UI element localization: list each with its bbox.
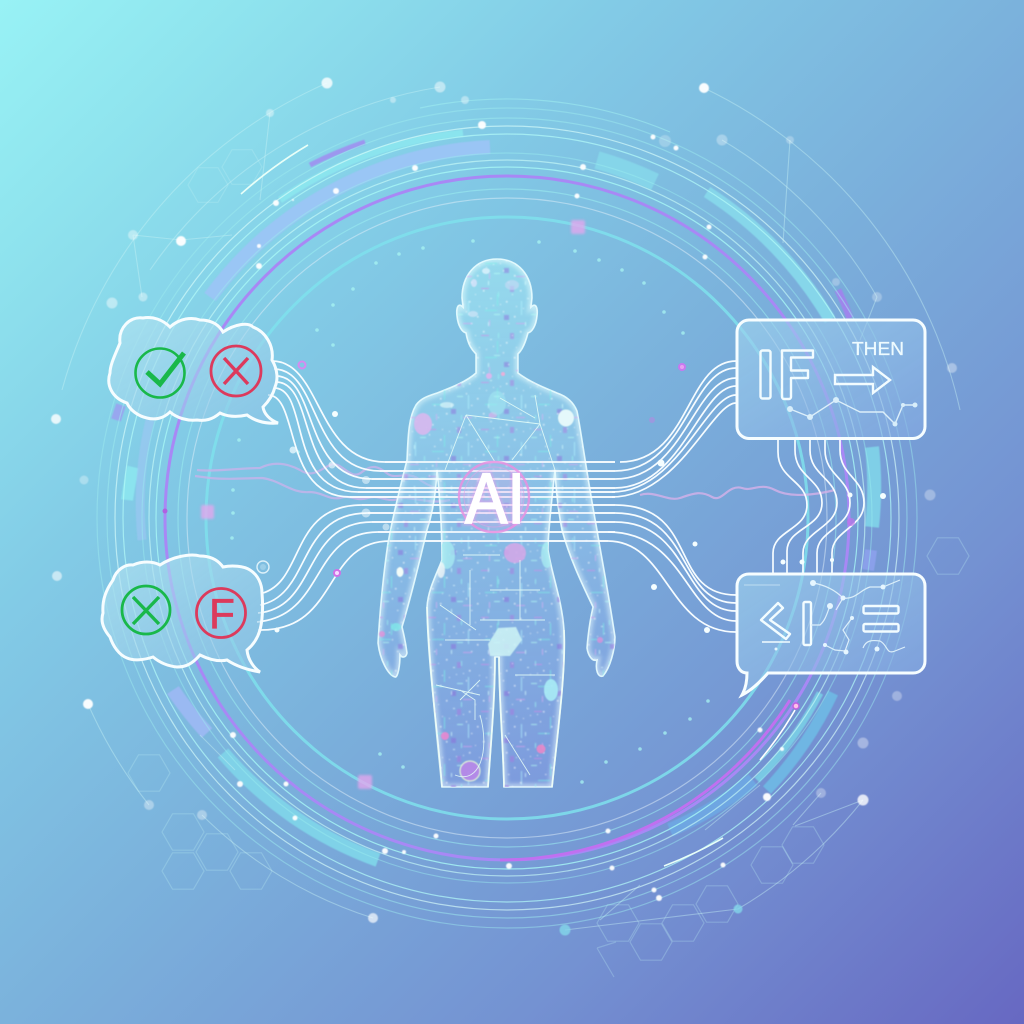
circuit traces [744, 580, 905, 652]
arrow [835, 367, 890, 393]
body bright contour [427, 607, 564, 787]
hexagon mesh background [128, 150, 969, 977]
thin rings [97, 99, 917, 928]
cloud shape [102, 555, 263, 672]
IF outlined letters [760, 350, 813, 399]
cloud shape [109, 317, 278, 423]
panel: comparison operators speech box [737, 574, 925, 695]
icon: red F circle [196, 588, 246, 638]
inner edge glow [378, 259, 615, 787]
concentric rings [62, 83, 960, 930]
thick arc bands [116, 133, 874, 860]
AI core emblem: AI [465, 460, 525, 539]
human body figure [370, 250, 620, 795]
body circuitry texture [370, 250, 620, 795]
magenta wire nodes [162, 362, 855, 709]
speech bubble: X and F [102, 555, 263, 672]
icon: green check circle [136, 348, 184, 398]
inner cyan ring [206, 217, 808, 819]
less-than symbol outline [761, 602, 898, 645]
ring nodes [51, 78, 957, 936]
THEN label: THEN [852, 339, 904, 359]
vertical wires between logic boxes [773, 440, 864, 574]
pink glow [460, 463, 528, 531]
icon: red cross circle [211, 346, 261, 396]
purple ring [165, 176, 849, 860]
panel: IF THEN box [737, 320, 925, 438]
mini line chart [787, 397, 918, 426]
icon: green cross circle [122, 586, 170, 634]
box shape [737, 574, 925, 695]
inner dot field [230, 239, 710, 784]
outer network arcs [62, 83, 960, 930]
circuit lines [436, 394, 556, 778]
arc accents [241, 145, 795, 866]
speech bubble: true and false [109, 317, 278, 423]
body silhouette [378, 259, 615, 787]
wires: right [620, 361, 736, 462]
icon: red F circle: F [209, 590, 235, 637]
horizontal wire bright strip over body [350, 462, 615, 541]
pink glow squares [201, 220, 585, 789]
wires: top-left bubble to body [257, 361, 736, 632]
wavy signal traces [195, 464, 835, 502]
organ blobs [379, 268, 603, 781]
wire nodes [257, 411, 886, 633]
AI core emblem: AI [465, 460, 525, 539]
